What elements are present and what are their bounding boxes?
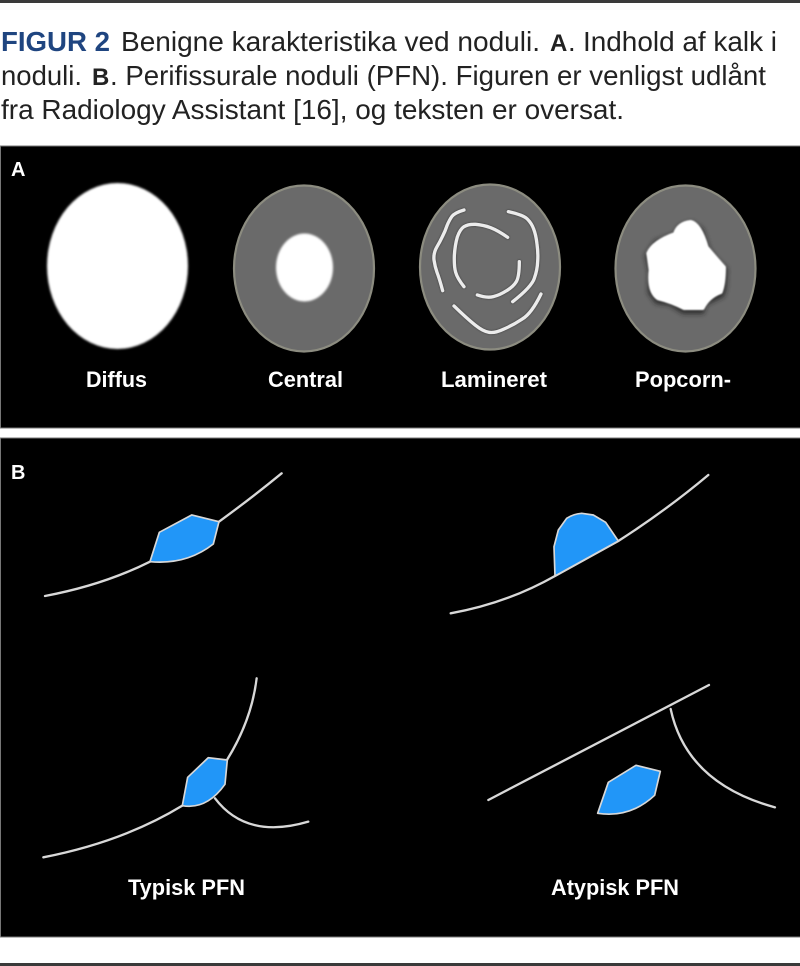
nodule: popcorn	[616, 186, 756, 352]
nodule: central	[234, 186, 374, 352]
caption: .	[568, 26, 576, 57]
diagram: atypical PFN with rounded shape	[451, 475, 708, 613]
label: Lamineret: Lamineret	[441, 367, 548, 392]
panel A: calcification patterns	[0, 146, 800, 428]
label: Central: Central	[268, 367, 343, 392]
label: Diffus: Diffus	[86, 367, 147, 392]
caption: A	[550, 30, 567, 57]
caption label: FIGUR 2: FIGUR 2	[1, 26, 110, 57]
panel B: perifissural nodules	[0, 438, 800, 937]
caption: Benigne karakteristika ved noduli.	[121, 26, 540, 57]
label: Popcorn-: Popcorn-	[635, 367, 731, 392]
caption	[1, 26, 777, 125]
label: Typisk PFN: Typisk PFN	[128, 875, 245, 900]
caption: fra Radiology Assistant [16], og teksten er oversat.	[1, 94, 624, 125]
caption: B	[92, 64, 109, 91]
caption: noduli.	[1, 60, 82, 91]
diagram: typical PFN at fissure junction	[43, 678, 308, 857]
diagram: typical PFN on a fissure	[45, 473, 282, 596]
panel letter B: B	[11, 462, 25, 484]
nodule: diffus	[47, 183, 188, 349]
nodule: lamineret	[420, 184, 560, 350]
label: Atypisk PFN: Atypisk PFN	[551, 875, 679, 900]
bottom rule	[0, 963, 800, 966]
diagram: atypical PFN separate from fissure	[488, 685, 775, 814]
top rule	[0, 0, 800, 3]
panel letter A: A	[11, 159, 25, 181]
caption: Indhold af kalk i	[583, 26, 777, 57]
caption: . Perifissurale noduli (PFN). Figuren er venligst udlånt	[110, 60, 766, 91]
